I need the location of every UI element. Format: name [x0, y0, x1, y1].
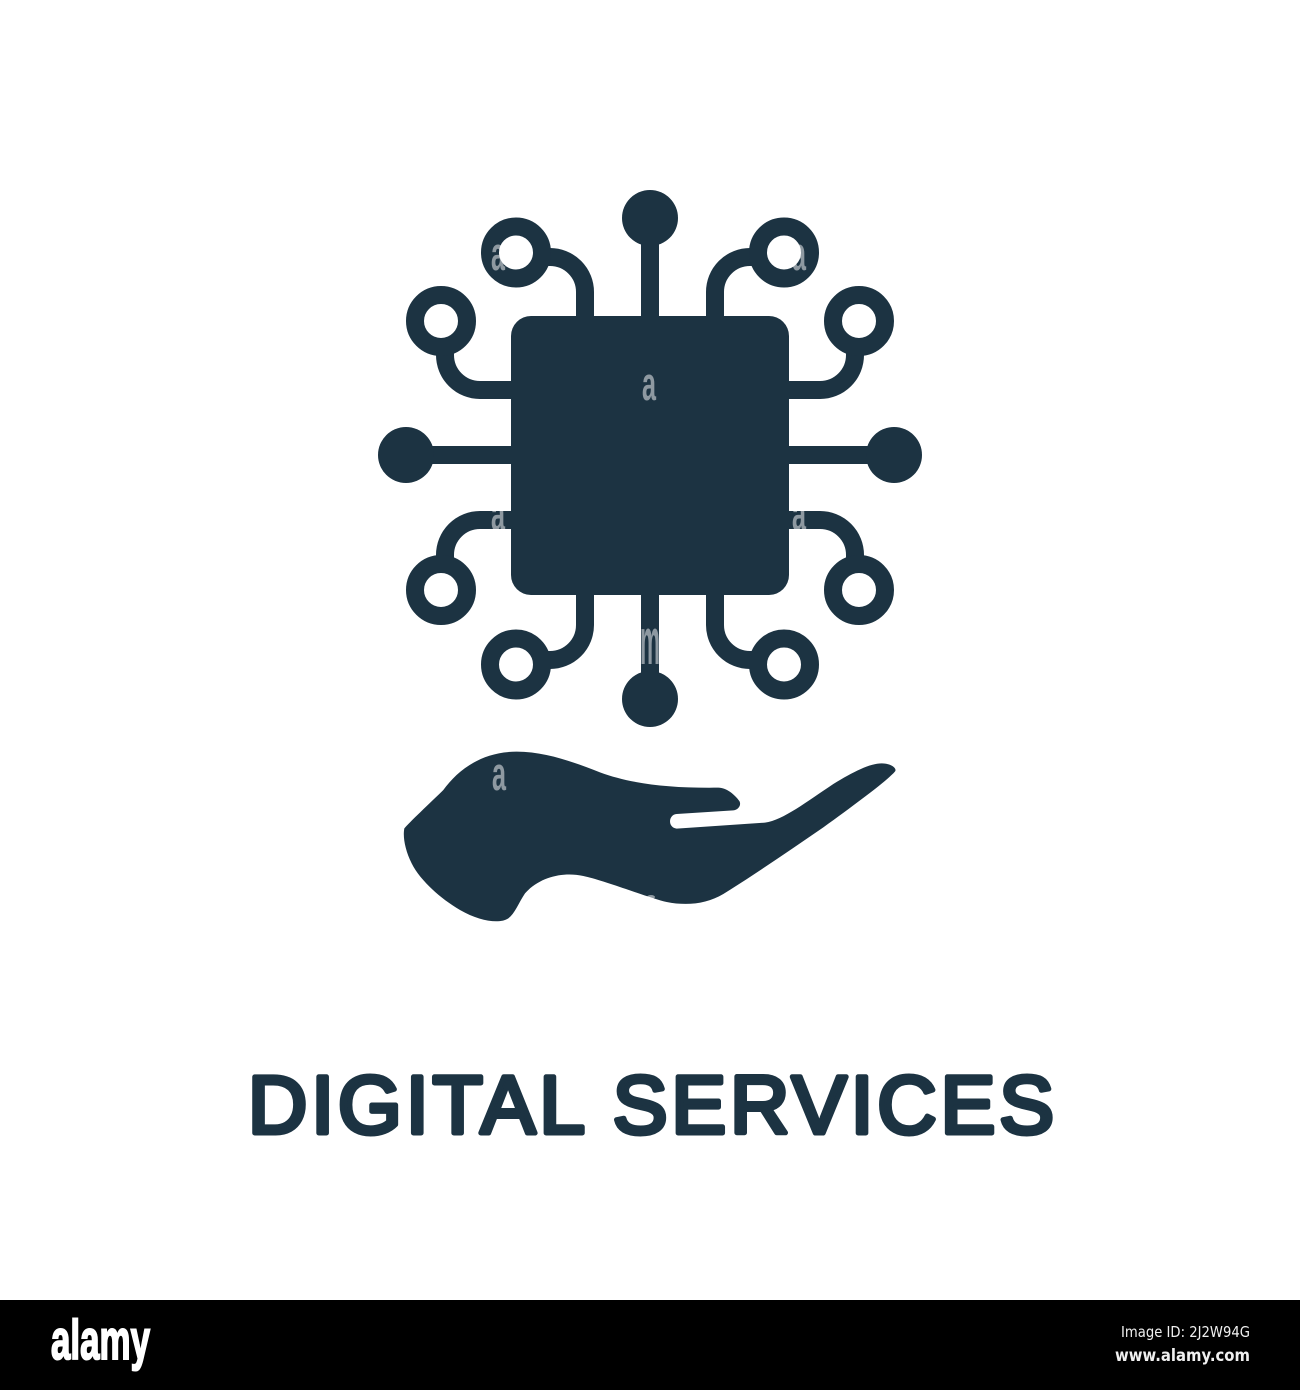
footer bar	[0, 1300, 1300, 1390]
chip body	[511, 316, 789, 595]
ring terminals	[415, 226, 885, 690]
website: www.alamy.com	[1115, 1346, 1250, 1366]
watermark marks: a	[491, 227, 505, 280]
footer logo: alamy	[51, 1308, 150, 1371]
image id: Image ID: 2J2W94G	[1121, 1323, 1250, 1341]
straight connectors with solid terminals	[378, 190, 922, 727]
watermark marks	[491, 227, 806, 899]
watermark marks: a	[491, 487, 505, 540]
title: DIGITAL SERVICES	[248, 1060, 1054, 1151]
watermark marks: a	[492, 747, 506, 800]
icon: open hand	[404, 752, 895, 921]
watermark marks: a	[792, 487, 806, 540]
curved connectors	[445, 257, 855, 660]
watermark marks: a	[642, 357, 656, 410]
watermark marks: m	[640, 604, 660, 678]
icon: circuit chip	[378, 190, 922, 727]
watermark marks: a	[792, 227, 806, 280]
